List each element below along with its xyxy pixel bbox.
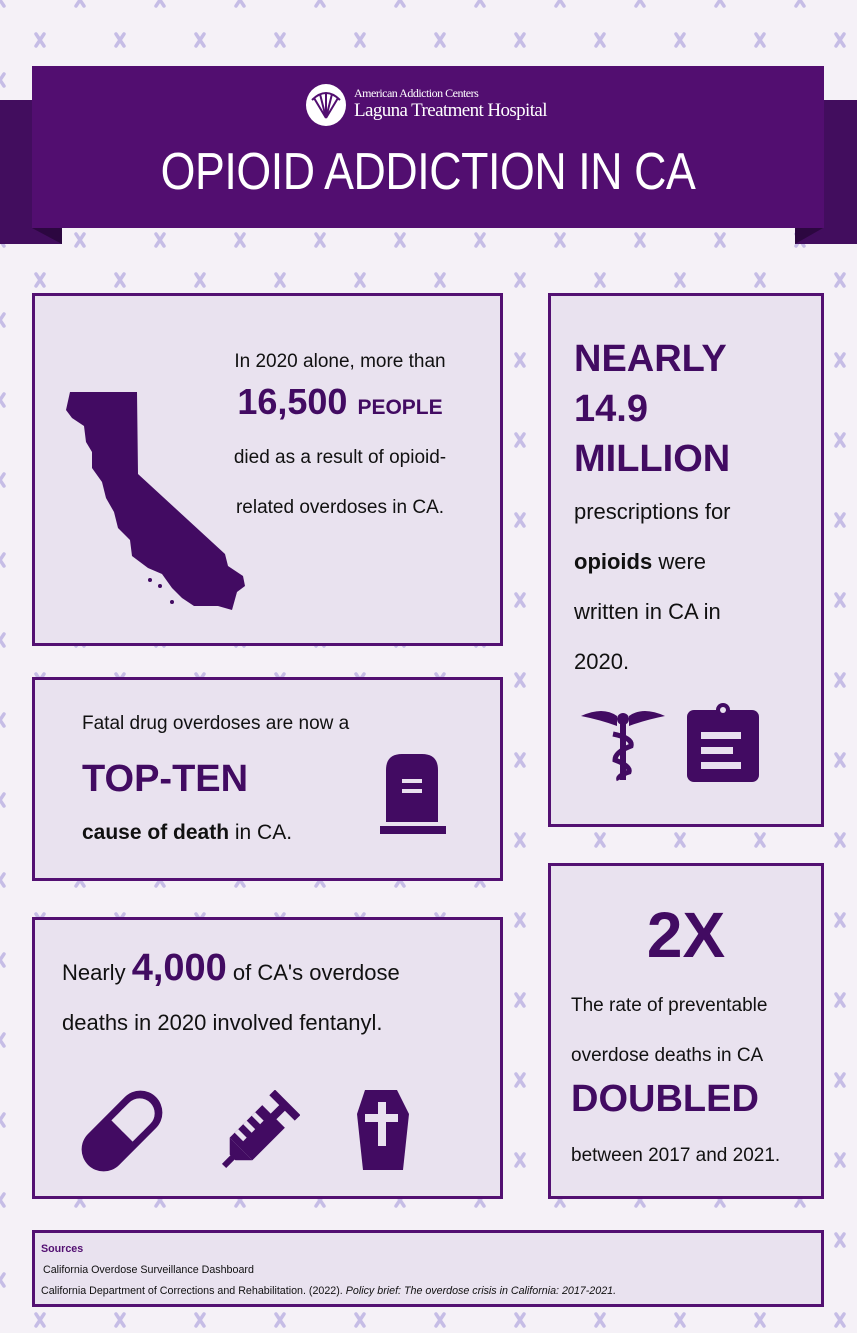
panel: fentanyl: deaths in 2020 involved fentanyl. — [62, 1010, 382, 1035]
panel: 14.9 million prescriptions: written in CA in — [574, 599, 721, 624]
icon: tombstone — [380, 754, 446, 834]
panel: 14.9 million prescriptions: prescriptions for — [574, 499, 731, 524]
panel: 14.9 million prescriptions: opioids were — [574, 549, 706, 574]
panel: sources: Sources — [41, 1243, 83, 1255]
panel: 2X doubled: overdose deaths in CA — [571, 1045, 763, 1066]
panel: top-ten cause: cause of death in CA. — [82, 821, 292, 844]
title: OPIOID ADDICTION IN CA — [161, 143, 695, 201]
panel: sources: California Department of Corrections and Rehabilitation. (2022). Policy brief: The overdose crisis in California: 2017-2021. — [41, 1285, 616, 1297]
icon: caduceus — [581, 711, 665, 782]
icon: coffin — [357, 1090, 409, 1170]
panel: fentanyl: Nearly 4,000 of CA's overdose — [62, 947, 400, 989]
icon: pill — [82, 1090, 162, 1172]
panel: top-ten cause: Fatal drug overdoses are now a — [82, 713, 349, 734]
panel: 14.9 million prescriptions: NEARLY — [574, 338, 727, 380]
icon: California map — [66, 392, 245, 610]
panel: 14.9 million prescriptions: MILLION — [574, 438, 730, 480]
panel: 14.9 million prescriptions — [548, 293, 824, 827]
panel: sources — [32, 1230, 824, 1307]
logo: Laguna Treatment Hospital — [354, 100, 547, 121]
panel: fentanyl — [32, 917, 503, 1199]
panel: top-ten cause — [32, 677, 503, 881]
panel: 2X doubled: between 2017 and 2021. — [571, 1145, 780, 1166]
panel: 2X doubled — [548, 863, 824, 1199]
banner — [0, 66, 857, 244]
panel: 2X doubled: The rate of preventable — [571, 995, 767, 1016]
text block — [234, 351, 446, 518]
icon: clipboard — [687, 703, 759, 782]
text block: related overdoses in CA. — [236, 497, 444, 518]
panel: 14.9 million prescriptions: 14.9 — [574, 388, 648, 430]
panel: 14.9 million prescriptions: 2020. — [574, 649, 629, 674]
text block: 16,500 PEOPLE — [237, 381, 443, 422]
logo: American Addiction Centers — [354, 86, 478, 100]
logo — [306, 84, 548, 126]
text block: In 2020 alone, more than — [234, 351, 446, 372]
panel: sources: California Overdose Surveillance Dashboard — [43, 1264, 254, 1276]
text block: died as a result of opioid- — [234, 447, 446, 468]
panel: 16,500 deaths — [32, 293, 503, 646]
panel: top-ten cause: TOP-TEN — [82, 758, 248, 800]
panel: 2X doubled: DOUBLED — [571, 1078, 759, 1120]
panel: 2X doubled: 2X — [647, 899, 725, 971]
icon: syringe — [222, 1090, 300, 1168]
